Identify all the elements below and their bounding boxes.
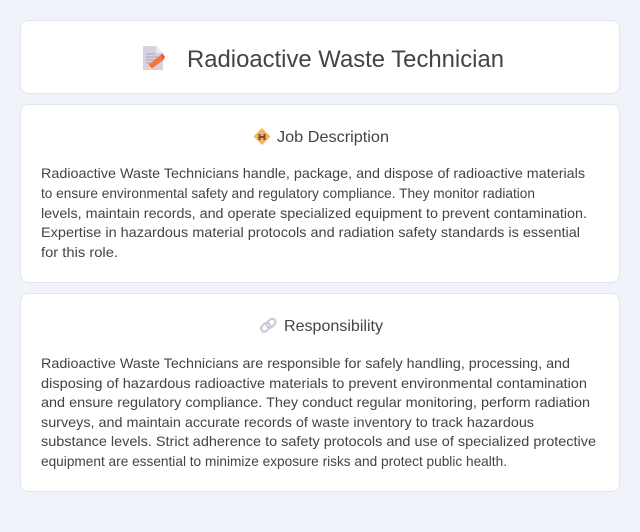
text block: job description: to ensure environmental safety and regulatory compliance. They monitor radiation bbox=[41, 185, 535, 201]
text block: responsibility: substance levels. Strict adherence to safety protocols and use of specialized protective bbox=[41, 433, 596, 449]
text block: job description bbox=[41, 165, 587, 260]
text block: responsibility: disposing of hazardous radioactive materials to prevent environmental contamination bbox=[41, 375, 587, 391]
icon: chain link bbox=[260, 317, 277, 333]
text block: responsibility bbox=[41, 355, 596, 469]
title: Radioactive Waste Technician bbox=[187, 46, 504, 73]
text block: job description: for this role. bbox=[41, 244, 118, 260]
panel: job description bbox=[20, 104, 620, 282]
icon: document with pencil bbox=[143, 46, 165, 70]
panel: title card bbox=[20, 20, 620, 94]
panel: responsibility bbox=[20, 294, 620, 492]
text block: responsibility: Radioactive Waste Technicians are responsible for safely handling, processing, and bbox=[41, 355, 570, 371]
text block: responsibility: and ensure regulatory compliance. They conduct regular monitoring, perform radiation bbox=[41, 394, 590, 410]
icon: diamond road sign bbox=[254, 128, 270, 145]
heading: responsibility: Responsibility bbox=[284, 318, 383, 335]
text block: job description: Expertise in hazardous material protocols and radiation safety standards is essential bbox=[41, 224, 580, 240]
text block: job description: Radioactive Waste Technicians handle, package, and dispose of radioactive materials bbox=[41, 165, 585, 181]
text block: job description: levels, maintain records, and operate specialized equipment to prevent contamination. bbox=[41, 205, 587, 221]
text block: responsibility: equipment are essential to minimize exposure risks and protect public health. bbox=[41, 453, 507, 469]
text block: responsibility: surveys, and maintain accurate records of waste inventory to track hazardous bbox=[41, 414, 534, 430]
heading: job description: Job Description bbox=[277, 129, 389, 146]
